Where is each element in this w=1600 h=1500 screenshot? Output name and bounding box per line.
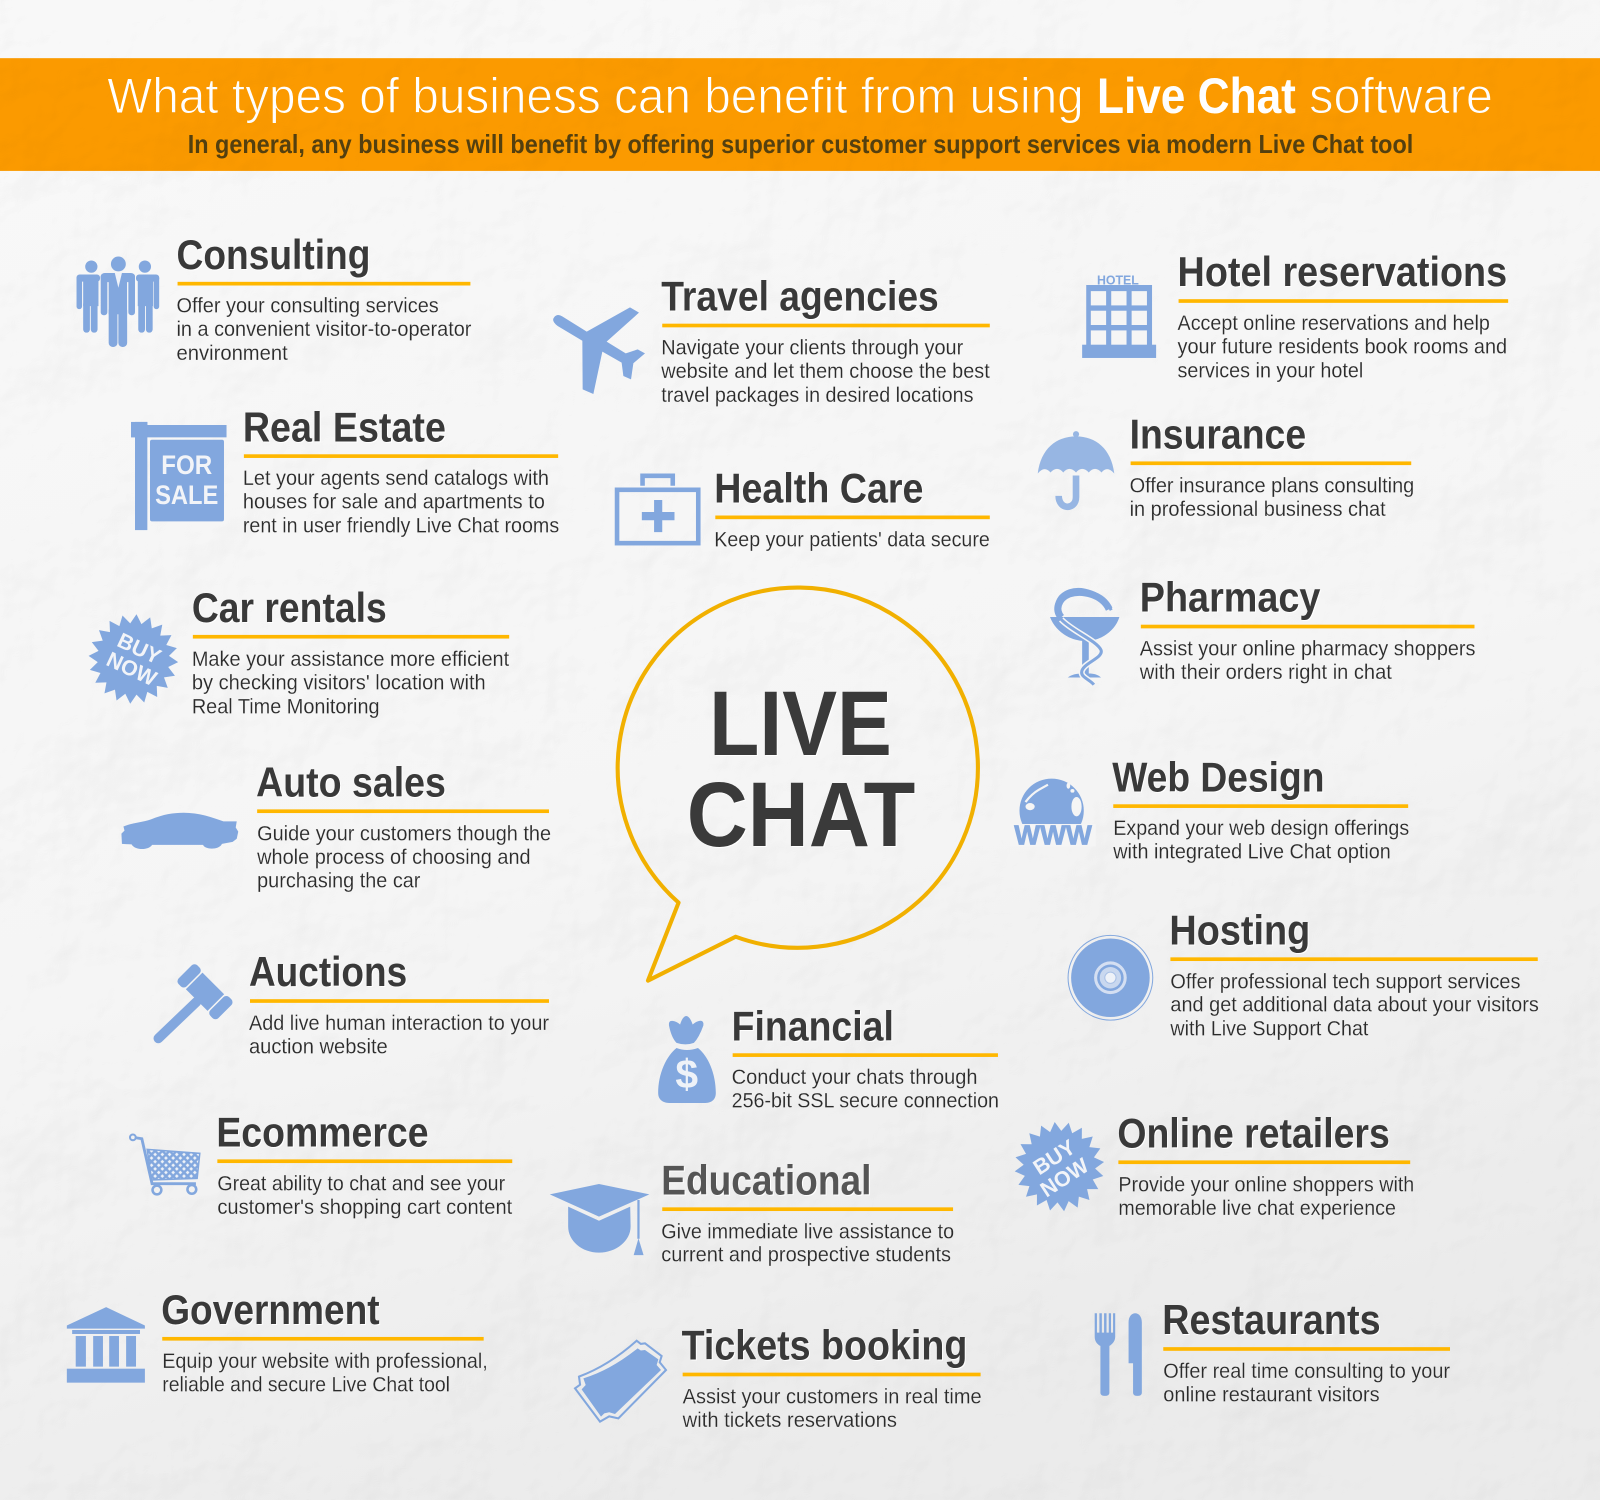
description: 256-bit SSL secure connection — [732, 1090, 999, 1113]
icon: fork and knife — [1095, 1313, 1142, 1396]
icon: umbrella — [1038, 431, 1114, 507]
description: Accept online reservations and help — [1178, 312, 1490, 335]
icon: ticket — [575, 1341, 666, 1422]
description: with their orders right in chat — [1139, 661, 1392, 684]
icon: compact disc — [1068, 935, 1153, 1020]
description: auction website — [249, 1036, 388, 1059]
icon: hotel building: HOTEL — [1097, 273, 1139, 288]
description: in professional business chat — [1130, 498, 1386, 521]
description — [177, 295, 471, 365]
panel: Web Design — [1010, 753, 1409, 864]
description — [243, 467, 559, 538]
icon: car — [121, 813, 238, 849]
description — [162, 1350, 488, 1396]
icon: buy now badge — [85, 611, 181, 707]
description: Real Time Monitoring — [192, 695, 380, 718]
description — [249, 1012, 549, 1059]
heading: Hotel reservations — [1178, 248, 1507, 295]
icon: for sale sign: SALE — [155, 480, 218, 510]
description: memorable live chat experience — [1118, 1197, 1396, 1220]
description: Offer insurance plans consulting — [1130, 474, 1414, 497]
icon: graduation cap — [550, 1184, 649, 1255]
description: Offer real time consulting to your — [1163, 1360, 1450, 1383]
description: Offer professional tech support services — [1170, 970, 1520, 993]
title: What types of business can benefit from using — [107, 67, 1084, 124]
description — [192, 648, 509, 718]
description: environment — [177, 342, 288, 365]
description: Assist your online pharmacy shoppers — [1140, 638, 1476, 661]
title: Live Chat — [1097, 67, 1296, 124]
subtitle: In general, any business will benefit by offering superior customer support services via modern Live Chat tool — [188, 129, 1413, 159]
heading: Web Design — [1112, 753, 1324, 800]
icon: hotel building — [1082, 273, 1156, 358]
description — [732, 1066, 999, 1113]
description: Guide your customers though the — [257, 822, 551, 845]
description — [1112, 817, 1409, 864]
description: Give immediate live assistance to — [661, 1220, 954, 1243]
panel: Hotel reservations — [1082, 248, 1508, 383]
description: by checking visitors' location with — [192, 671, 486, 694]
panel: Health Care — [617, 465, 990, 551]
icon: buy now badge: NOW — [103, 647, 161, 691]
icon: buy now badge: NOW — [1036, 1153, 1094, 1202]
description: your future residents book rooms and — [1178, 336, 1507, 359]
heading: Insurance — [1130, 410, 1306, 457]
description: Navigate your clients through your — [661, 337, 963, 360]
heading: Travel agencies — [661, 273, 939, 320]
icon: for sale sign — [131, 422, 227, 530]
description: rent in user friendly Live Chat rooms — [243, 515, 559, 538]
header banner — [0, 58, 1600, 171]
description — [256, 822, 551, 893]
panel: Auto sales — [121, 758, 551, 893]
heading: Ecommerce — [216, 1108, 429, 1155]
description: whole process of choosing and — [256, 846, 531, 869]
heading: Tickets booking — [682, 1322, 967, 1369]
icon: buy now badge: BUY — [1029, 1135, 1080, 1180]
icon: bank building — [67, 1307, 145, 1383]
icon: money bag — [658, 1016, 716, 1103]
description — [661, 1220, 954, 1267]
heading: Auctions — [249, 948, 407, 995]
panel: Tickets booking — [575, 1322, 982, 1432]
icon: people — [77, 257, 159, 347]
panel: Real Estate — [131, 403, 559, 538]
heading: Consulting — [177, 231, 370, 278]
bubble text: CHAT — [687, 764, 915, 866]
description: current and prospective students — [661, 1244, 951, 1267]
description: website and let them choose the best — [660, 360, 990, 383]
icon: buy now badge — [1010, 1117, 1109, 1216]
description — [1130, 474, 1414, 521]
heading: Educational — [661, 1156, 871, 1203]
description — [1178, 312, 1507, 383]
central speech bubble — [618, 588, 978, 981]
heading: Pharmacy — [1140, 574, 1321, 621]
icon: www globe — [1010, 779, 1096, 850]
heading: Online retailers — [1117, 1109, 1390, 1156]
panel: Car rentals — [85, 584, 509, 718]
description: houses for sale and apartments to — [243, 491, 545, 514]
description: customer's shopping cart content — [217, 1196, 512, 1219]
heading: Restaurants — [1162, 1296, 1381, 1343]
heading: Car rentals — [192, 584, 387, 631]
panel: Government — [67, 1286, 488, 1396]
panel: Educational — [550, 1156, 954, 1267]
description: in a convenient visitor-to-operator — [177, 318, 471, 341]
heading: Hosting — [1169, 906, 1310, 953]
title: software — [1309, 67, 1493, 124]
icon: gavel — [158, 963, 234, 1038]
description: Great ability to chat and see your — [217, 1172, 505, 1195]
description: purchasing the car — [257, 870, 420, 893]
description: Make your assistance more efficient — [192, 648, 509, 671]
description: with Live Support Chat — [1169, 1018, 1369, 1041]
panel: Auctions — [158, 948, 549, 1059]
description — [1163, 1360, 1450, 1407]
description: Expand your web design offerings — [1113, 817, 1409, 840]
panel: Restaurants — [1095, 1296, 1450, 1407]
icon: bowl of hygieia — [1050, 589, 1119, 685]
panel: Consulting — [77, 231, 471, 365]
description: services in your hotel — [1178, 360, 1363, 383]
description: Keep your patients' data secure — [714, 528, 990, 551]
description — [1169, 970, 1539, 1041]
description: online restaurant visitors — [1163, 1384, 1380, 1407]
description: Conduct your chats through — [732, 1066, 978, 1089]
panel: Travel agencies — [553, 273, 990, 407]
description — [1139, 638, 1476, 684]
panel: Financial — [658, 1002, 999, 1113]
icon: for sale sign: FOR — [161, 450, 212, 480]
description: with integrated Live Chat option — [1112, 841, 1391, 864]
icon: shopping cart — [130, 1134, 200, 1194]
description — [682, 1386, 982, 1432]
bubble text — [687, 673, 915, 866]
description: with tickets reservations — [682, 1409, 897, 1432]
description: Let your agents send catalogs with — [243, 467, 549, 490]
description: Offer your consulting services — [177, 295, 439, 318]
panel: Insurance — [1038, 410, 1414, 521]
description — [217, 1172, 512, 1219]
panel: Pharmacy — [1050, 574, 1476, 685]
icon: buy now badge: BUY — [114, 628, 165, 669]
description: and get additional data about your visitors — [1170, 994, 1539, 1017]
icon: first aid kit — [617, 476, 698, 543]
bubble text: LIVE — [709, 673, 892, 775]
panel: Online retailers — [1010, 1109, 1414, 1220]
heading: Health Care — [714, 465, 923, 512]
icon: airplane — [553, 307, 645, 394]
heading: Auto sales — [256, 758, 446, 805]
description: Provide your online shoppers with — [1118, 1173, 1414, 1196]
description — [660, 337, 990, 407]
panel: Ecommerce — [130, 1108, 512, 1219]
description: Assist your customers in real time — [683, 1386, 982, 1409]
description — [1118, 1173, 1414, 1220]
description: reliable and secure Live Chat tool — [162, 1373, 450, 1396]
panel: Hosting — [1068, 906, 1539, 1041]
icon: money bag: $ — [675, 1051, 698, 1097]
description: Equip your website with professional, — [162, 1350, 488, 1373]
heading: Financial — [732, 1002, 894, 1049]
icon: www globe: WWW — [1014, 819, 1092, 850]
heading: Government — [161, 1286, 380, 1333]
heading: Real Estate — [243, 403, 446, 450]
description: Add live human interaction to your — [249, 1012, 549, 1035]
description: travel packages in desired locations — [661, 384, 973, 407]
